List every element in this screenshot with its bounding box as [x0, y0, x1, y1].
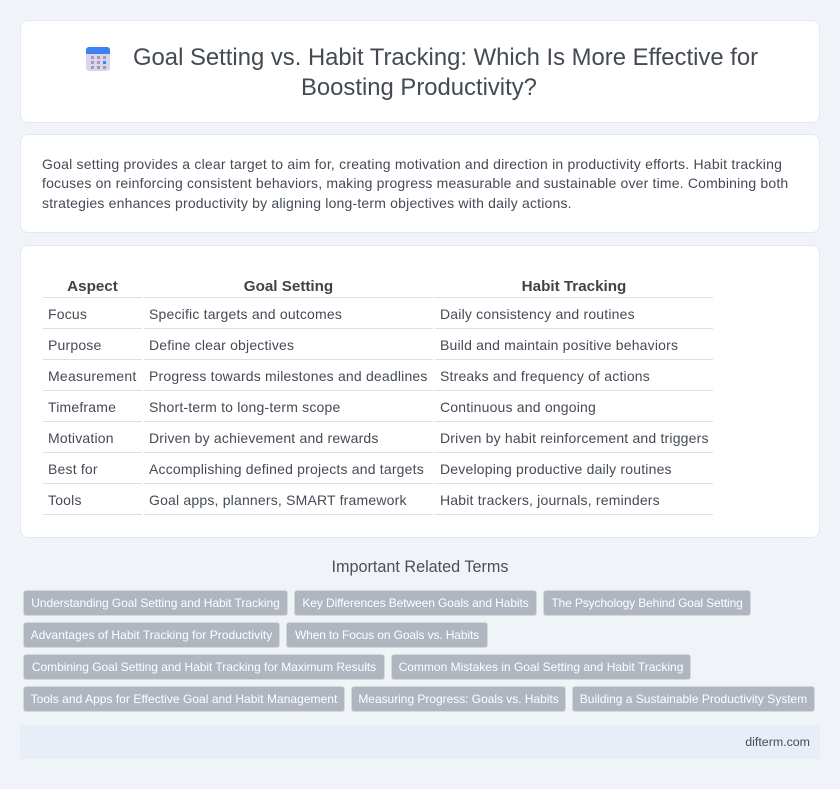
comparison table: Goal apps, planners, SMART framework: [149, 492, 407, 508]
comparison table: Timeframe: [48, 399, 116, 415]
comparison table: Driven by achievement and rewards: [149, 430, 379, 446]
comparison table: Streaks and frequency of actions: [440, 368, 650, 384]
comparison table: Focus: [48, 306, 87, 322]
heading: related terms: Important Related Terms: [332, 558, 508, 576]
comparison table: Daily consistency and routines: [440, 306, 635, 322]
comparison table: Measurement: [48, 368, 137, 384]
comparison table: Build and maintain positive behaviors: [440, 337, 678, 353]
comparison table: Purpose: [48, 337, 101, 353]
intro text: [42, 156, 788, 211]
comparison table: Accomplishing defined projects and targets: [149, 461, 424, 477]
comparison table: Tools: [48, 492, 82, 508]
comparison table: Specific targets and outcomes: [149, 306, 342, 322]
icon: calendar: [86, 47, 110, 71]
tag list: related terms: [23, 590, 815, 712]
panel: comparison table: [20, 245, 820, 538]
tag list: related terms: Understanding Goal Setting and Habit Tracking: [31, 596, 280, 610]
comparison table: Define clear objectives: [149, 337, 294, 353]
title: [133, 44, 758, 101]
intro text: Goal setting provides a clear target to aim for, creating motivation and direction in productivity efforts. Habit tracking: [42, 156, 782, 172]
intro text: strategies enhances productivity by aligning long-term objectives with daily actions.: [42, 195, 572, 211]
column header: Habit Tracking: Habit Tracking: [522, 278, 626, 295]
tag list: related terms: When to Focus on Goals vs. Habits: [295, 628, 479, 642]
comparison table: Best for: [48, 461, 98, 477]
intro text: focuses on reinforcing consistent behaviors, making progress measurable and sustainable over time. Combining both: [42, 175, 788, 191]
comparison table: Developing productive daily routines: [440, 461, 672, 477]
tag list: related terms: Building a Sustainable Productivity System: [580, 692, 807, 706]
tag list: related terms: Tools and Apps for Effective Goal and Habit Management: [31, 692, 337, 706]
comparison table: Short-term to long-term scope: [149, 399, 340, 415]
footer: [20, 725, 820, 759]
footer site name: difterm.com: [745, 735, 810, 749]
panel: introduction: [20, 134, 820, 233]
title: Boosting Productivity?: [301, 74, 537, 101]
tag list: related terms: Combining Goal Setting and Habit Tracking for Maximum Results: [32, 660, 376, 674]
column header: Aspect: Aspect: [67, 278, 118, 295]
comparison table: [43, 278, 713, 515]
comparison table: Progress towards milestones and deadlines: [149, 368, 428, 384]
panel: header: [20, 20, 820, 123]
tag list: related terms: The Psychology Behind Goal Setting: [551, 596, 743, 610]
tag list: related terms: Measuring Progress: Goals vs. Habits: [358, 692, 559, 706]
comparison table: Motivation: [48, 430, 114, 446]
tag list: related terms: Common Mistakes in Goal Setting and Habit Tracking: [399, 660, 683, 674]
title: Goal Setting vs. Habit Tracking: Which Is More Effective for: [133, 44, 758, 71]
comparison table: Driven by habit reinforcement and triggers: [440, 430, 709, 446]
tag list: related terms: Advantages of Habit Tracking for Productivity: [31, 628, 272, 642]
tag list: related terms: Key Differences Between Goals and Habits: [302, 596, 529, 610]
column header: Goal Setting: Goal Setting: [244, 278, 333, 295]
comparison table: Continuous and ongoing: [440, 399, 596, 415]
comparison table: Habit trackers, journals, reminders: [440, 492, 660, 508]
